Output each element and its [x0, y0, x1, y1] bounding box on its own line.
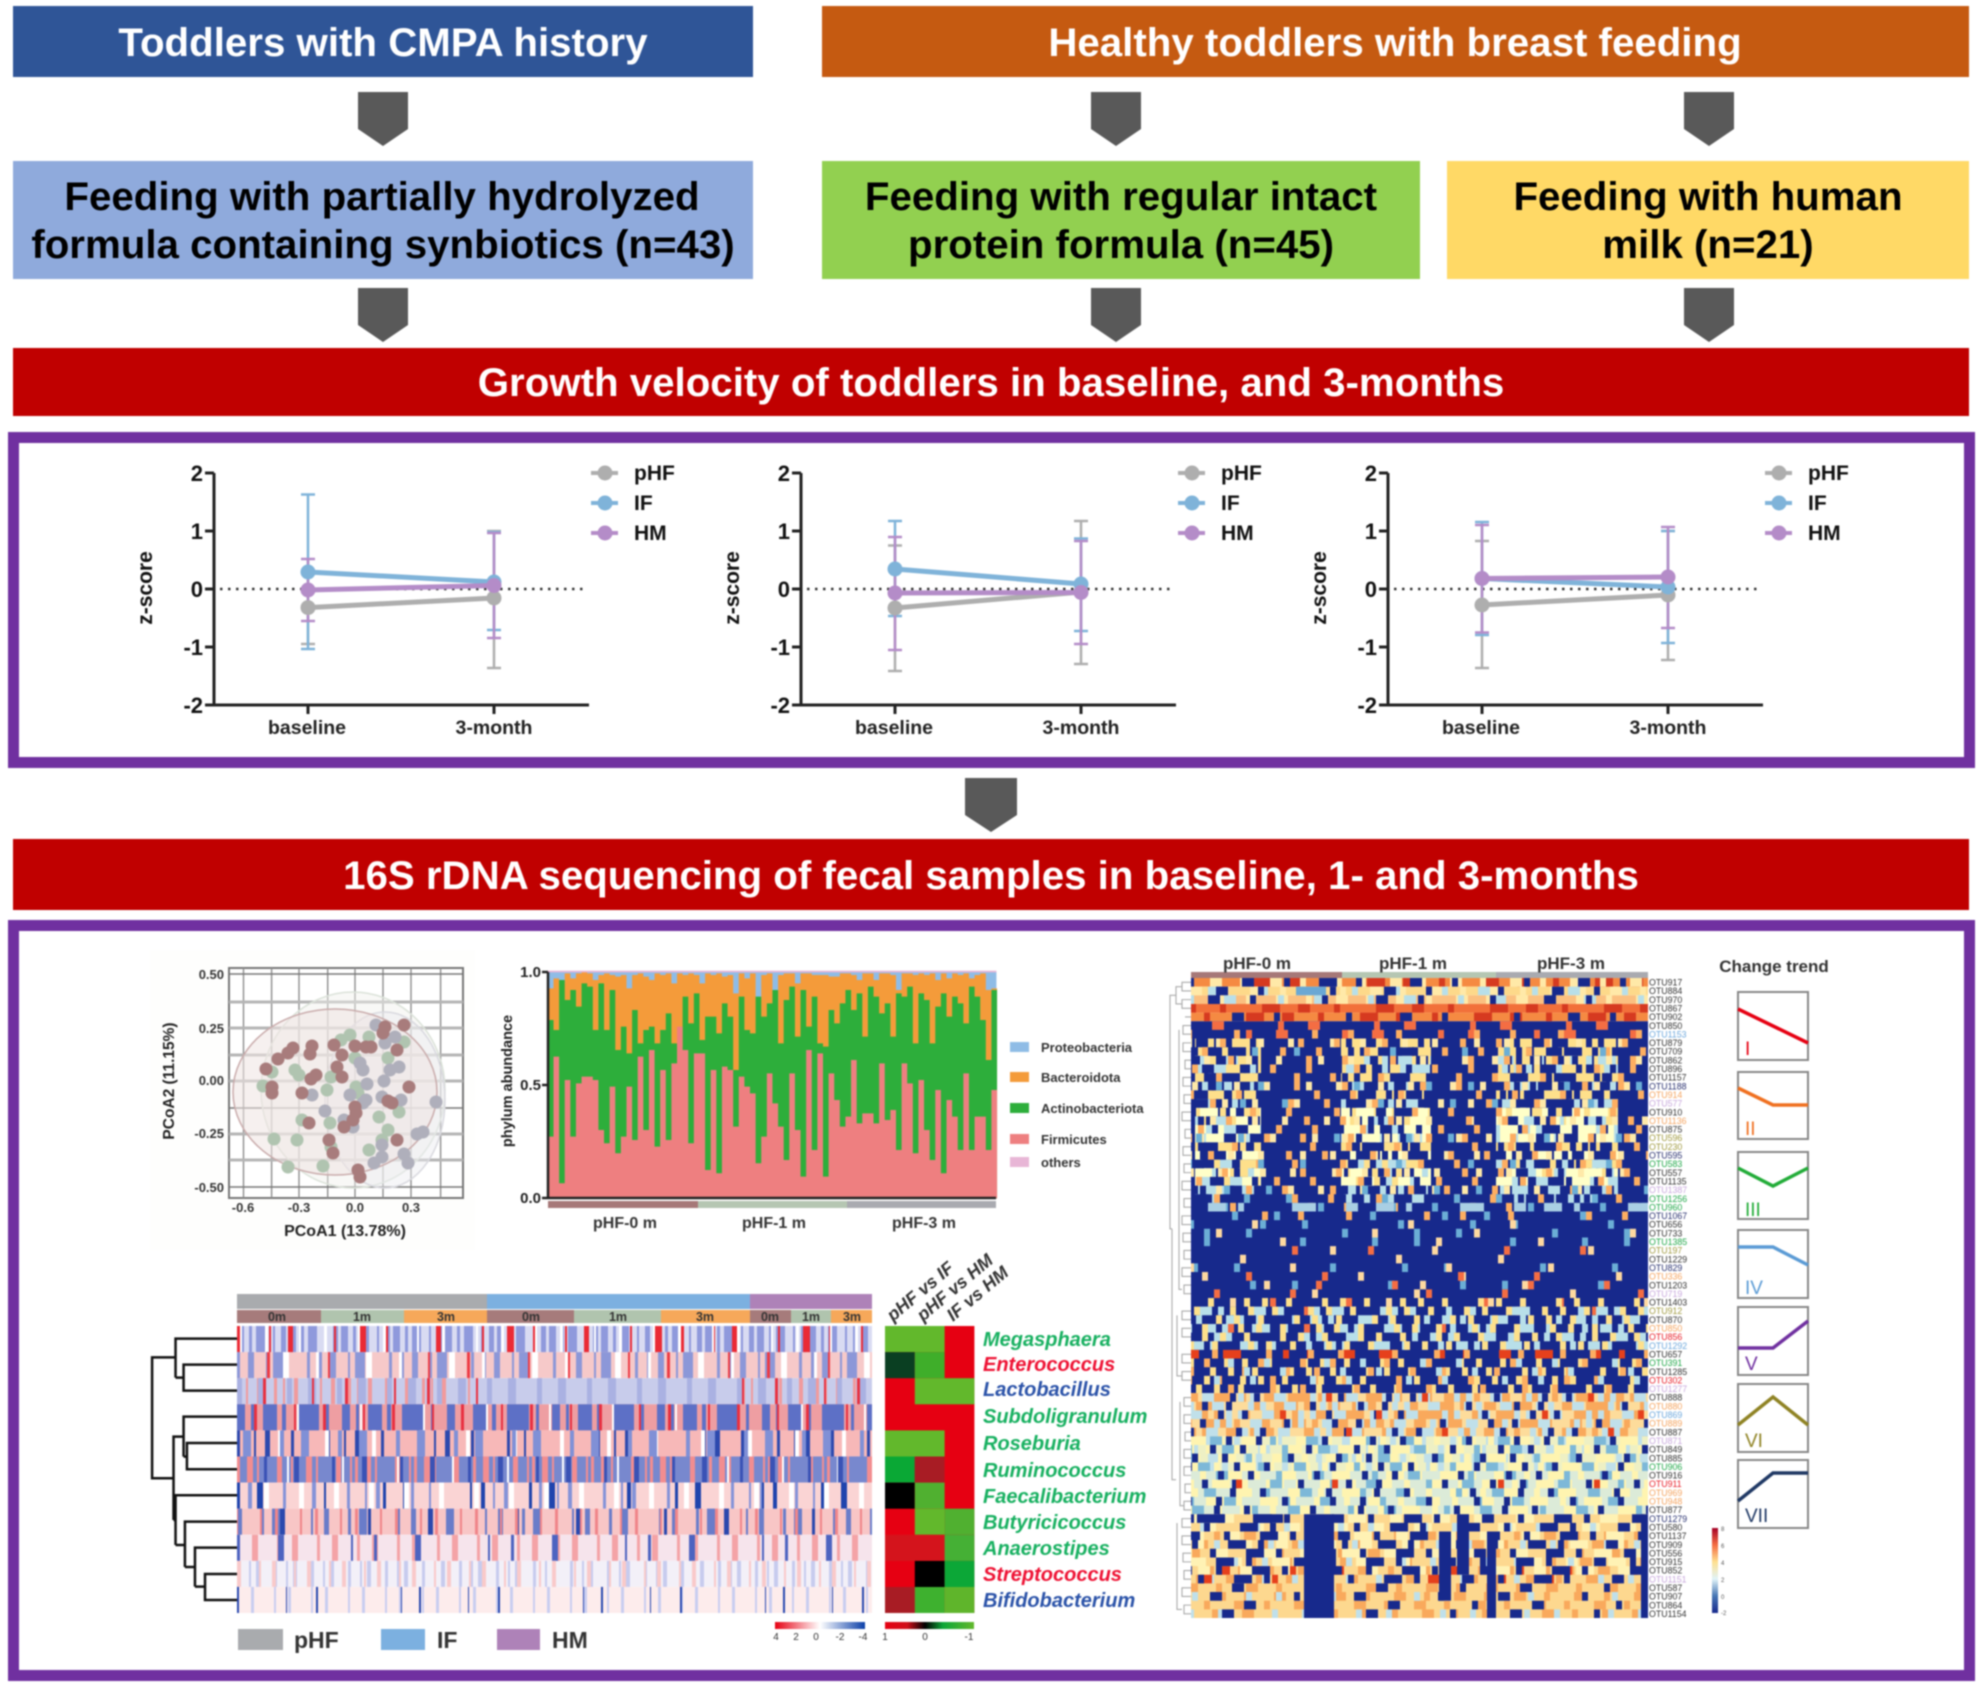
chart: PCoA scatter	[150, 950, 475, 1250]
banner: growth velocity	[13, 348, 1969, 416]
change trend panel	[1719, 957, 1829, 1528]
OTU labels: OTU583	[1649, 1159, 1682, 1169]
line chart 3: 2	[1365, 461, 1377, 486]
OTU labels: OTU909	[1649, 1540, 1682, 1550]
OTU labels: OTU906	[1649, 1462, 1682, 1472]
color scale: comparison: -1	[965, 1632, 974, 1643]
OTU labels: OTU910	[1649, 1107, 1682, 1117]
OTU labels: OTU1067	[1649, 1211, 1687, 1221]
line chart 2: -2	[770, 693, 790, 718]
OTU labels: OTU587	[1649, 1583, 1682, 1593]
OTU labels: OTU880	[1649, 1401, 1682, 1411]
OTU labels: OTU1279	[1649, 1514, 1687, 1524]
color bar: 2	[1721, 1578, 1725, 1584]
line chart 2: 2	[778, 461, 790, 486]
OTU labels: OTU912	[1649, 1306, 1682, 1316]
OTU labels: OTU969	[1649, 1488, 1682, 1498]
header: toddlers with CMPA history	[13, 6, 753, 77]
column headers: pHF-3 m	[1537, 954, 1605, 973]
legend: phyla	[1010, 1040, 1144, 1170]
banner: growth velocity: Growth velocity of toddlers in baseline, and 3-months	[478, 360, 1504, 405]
OTU labels: OTU917	[1649, 978, 1682, 988]
OTU labels: OTU879	[1649, 1038, 1682, 1048]
header: toddlers with CMPA history: Toddlers with CMPA history	[118, 20, 648, 65]
box: partially hydrolyzed formula: Feeding with partially hydrolyzed	[64, 174, 700, 219]
legend: phyla: Proteobacteria	[1041, 1040, 1133, 1055]
change trend panel: Change trend	[1719, 957, 1829, 976]
OTU labels: OTU887	[1649, 1427, 1682, 1437]
OTU labels: OTU1157	[1649, 1073, 1687, 1083]
OTU labels: OTU577	[1649, 1099, 1682, 1109]
trend I: I	[1745, 1039, 1750, 1060]
genus labels: Enterococcus	[983, 1354, 1115, 1376]
line chart 3: pHF	[1808, 462, 1849, 485]
OTU labels: OTU719	[1649, 1289, 1682, 1299]
chart: phylum stacked bars: 1.0	[520, 964, 541, 981]
OTU labels: OTU1285	[1649, 1367, 1687, 1377]
legend: groups: pHF	[294, 1627, 339, 1653]
heatmap cells	[1190, 976, 1650, 1620]
chart: PCoA scatter: 0.3	[402, 1200, 420, 1215]
line chart 3: -2	[1357, 693, 1377, 718]
chart: PCoA scatter: 0.0	[346, 1200, 364, 1215]
line chart 3: HM	[1808, 522, 1841, 545]
line chart 1: 2	[191, 461, 203, 486]
OTU labels: OTU302	[1649, 1375, 1682, 1385]
OTU labels: OTU870	[1649, 1315, 1682, 1325]
line chart 1: IF	[634, 492, 653, 515]
annotation bars	[237, 1294, 872, 1324]
annotation bars: 3m	[437, 1310, 455, 1324]
OTU labels: OTU336	[1649, 1272, 1682, 1282]
comparison heatmap: pHF vs HM	[912, 1249, 998, 1326]
column headers	[1191, 954, 1648, 978]
OTU labels: OTU864	[1649, 1600, 1682, 1610]
OTU labels: OTU1153	[1649, 1029, 1687, 1039]
color scale: abundance: -4	[859, 1632, 868, 1643]
OTU labels: OTU867	[1649, 1004, 1682, 1014]
trend VII	[1738, 1460, 1808, 1528]
OTU labels: OTU391	[1649, 1358, 1682, 1368]
OTU labels: OTU896	[1649, 1064, 1682, 1074]
genus labels: Lactobacillus	[983, 1379, 1111, 1401]
chart: PCoA scatter: 0.00	[199, 1073, 224, 1088]
color scale: comparison	[882, 1622, 974, 1643]
OTU labels: OTU875	[1649, 1125, 1682, 1135]
line chart 2: -1	[770, 635, 790, 660]
genus labels: Butyricicoccus	[983, 1512, 1126, 1534]
OTU labels: OTU862	[1649, 1055, 1682, 1065]
box: partially hydrolyzed formula	[13, 161, 753, 279]
legend: phyla: Bacteroidota	[1041, 1070, 1121, 1085]
OTU labels: OTU580	[1649, 1522, 1682, 1532]
OTU labels: OTU1229	[1649, 1254, 1687, 1264]
legend: phyla: Firmicutes	[1041, 1132, 1107, 1147]
OTU labels: OTU914	[1649, 1090, 1682, 1100]
color scale: abundance: 2	[793, 1632, 799, 1643]
OTU labels: OTU884	[1649, 986, 1682, 996]
OTU labels: OTU829	[1649, 1263, 1682, 1273]
color scale: comparison: 1	[882, 1632, 888, 1643]
OTU labels: OTU1403	[1649, 1298, 1687, 1308]
line chart 2: IF	[1221, 492, 1240, 515]
OTU labels: OTU907	[1649, 1592, 1682, 1602]
box: human milk: milk (n=21)	[1602, 222, 1814, 267]
color scale: abundance: 4	[773, 1632, 779, 1643]
line chart 2: 3-month	[1043, 717, 1119, 739]
trend VI	[1738, 1384, 1808, 1452]
header: healthy toddlers with breast feeding: Healthy toddlers with breast feeding	[1048, 20, 1742, 65]
line chart 1: z-score	[134, 551, 157, 625]
OTU labels: OTU902	[1649, 1012, 1682, 1022]
annotation bars: 0m	[761, 1310, 779, 1324]
line chart 3: 3-month	[1630, 717, 1706, 739]
OTU labels: OTU856	[1649, 1332, 1682, 1342]
genus labels: Streptococcus	[983, 1564, 1122, 1586]
comparison heatmap: IF vs HM	[943, 1262, 1013, 1325]
line chart 3: z-score	[1308, 551, 1331, 625]
annotation bars: 0m	[522, 1310, 540, 1324]
arrows: first row	[358, 92, 1734, 146]
OTU labels: OTU916	[1649, 1471, 1682, 1481]
OTU labels: OTU595	[1649, 1150, 1682, 1160]
comparison heatmap	[882, 1249, 1013, 1613]
line chart 1: -2	[183, 693, 203, 718]
color scale: abundance: 0	[813, 1632, 819, 1643]
chart: PCoA scatter: PCoA2 (11.15%)	[161, 1022, 178, 1140]
annotation bars: 3m	[843, 1310, 861, 1324]
annotation bars: 0m	[268, 1310, 286, 1324]
color bar: -2	[1721, 1611, 1727, 1617]
color bar: 8	[1721, 1527, 1725, 1533]
chart: PCoA scatter: -0.50	[194, 1180, 224, 1195]
OTU labels	[1649, 978, 1687, 1619]
line chart 2: 1	[778, 519, 790, 544]
legend: groups: IF	[437, 1627, 457, 1653]
OTU labels: OTU1151	[1649, 1574, 1687, 1584]
header: healthy toddlers with breast feeding	[822, 6, 1969, 77]
legend: phyla: others	[1041, 1155, 1081, 1170]
box: human milk: Feeding with human	[1513, 174, 1903, 219]
genus labels: Megasphaera	[983, 1329, 1111, 1351]
OTU labels: OTU1256	[1649, 1194, 1687, 1204]
legend: groups	[238, 1627, 588, 1653]
chart: PCoA scatter: 0.50	[199, 967, 224, 982]
arrow: to sequencing	[965, 778, 1017, 832]
OTU labels: OTU885	[1649, 1453, 1682, 1463]
box: partially hydrolyzed formula: formula containing synbiotics (n=43)	[31, 222, 735, 267]
line chart 3: IF	[1808, 492, 1827, 515]
OTU labels: OTU656	[1649, 1220, 1682, 1230]
OTU labels: OTU1387	[1649, 1185, 1687, 1195]
chart: PCoA scatter: 0.25	[199, 1021, 224, 1036]
line chart 3: 1	[1365, 519, 1377, 544]
line chart 1: 0	[191, 577, 203, 602]
color scale: abundance: -2	[836, 1632, 845, 1643]
annotation bars: 3m	[696, 1310, 714, 1324]
chart: phylum stacked bars: phylum abundance	[500, 1015, 516, 1147]
OTU labels: OTU850	[1649, 1324, 1682, 1334]
heatmap cells	[236, 1325, 873, 1614]
comparison heatmap: pHF vs IF	[882, 1257, 958, 1326]
OTU labels: OTU733	[1649, 1228, 1682, 1238]
OTU labels: OTU230	[1649, 1142, 1682, 1152]
chart: PCoA scatter: -0.6	[232, 1200, 254, 1215]
color bar: 4	[1721, 1561, 1725, 1567]
chart: phylum stacked bars: 0.0	[520, 1190, 541, 1207]
OTU labels: OTU596	[1649, 1133, 1682, 1143]
panel: growth z-score charts	[14, 438, 1970, 762]
column headers: pHF-0 m	[1223, 954, 1291, 973]
panel: microbiota analyses	[14, 926, 1970, 1676]
line chart 3: -1	[1357, 635, 1377, 660]
OTU labels: OTU869	[1649, 1410, 1682, 1420]
chart: phylum stacked bars: pHF-0 m	[593, 1215, 657, 1232]
box: regular intact protein formula: Feeding with regular intact	[865, 174, 1377, 219]
OTU labels: OTU889	[1649, 1419, 1682, 1429]
OTU labels: OTU888	[1649, 1393, 1682, 1403]
line chart 3	[1308, 461, 1849, 739]
OTU labels: OTU1188	[1649, 1081, 1687, 1091]
OTU labels: OTU915	[1649, 1557, 1682, 1567]
legend: groups: HM	[552, 1627, 588, 1653]
line chart 1: -1	[183, 635, 203, 660]
trend I	[1738, 992, 1808, 1060]
trend VI: VI	[1745, 1431, 1763, 1452]
line chart 1: HM	[634, 522, 667, 545]
genus labels: Ruminococcus	[983, 1460, 1126, 1482]
genus labels: Anaerostipes	[982, 1538, 1110, 1560]
chart: PCoA scatter: PCoA1 (13.78%)	[284, 1223, 406, 1240]
banner: 16S rDNA sequencing: 16S rDNA sequencing of fecal samples in baseline, 1- and 3-months	[343, 853, 1639, 898]
genus labels: Roseburia	[983, 1433, 1081, 1455]
box: regular intact protein formula	[822, 161, 1420, 279]
color bar	[1712, 1527, 1727, 1617]
line chart 2: 0	[778, 577, 790, 602]
line chart 1	[134, 461, 675, 739]
line chart 2: z-score	[721, 551, 744, 625]
chart: phylum stacked bars: 0.5	[520, 1077, 541, 1094]
annotation bars: 1m	[802, 1310, 820, 1324]
banner: 16S rDNA sequencing	[13, 839, 1969, 910]
OTU labels: OTU1137	[1649, 1531, 1687, 1541]
color bar: 0	[1721, 1595, 1725, 1601]
trend II: II	[1745, 1119, 1756, 1140]
box: regular intact protein formula: protein formula (n=45)	[908, 222, 1334, 267]
legend: phyla: Actinobacteriota	[1041, 1101, 1144, 1116]
OTU labels: OTU1385	[1649, 1237, 1687, 1247]
line chart 3: 0	[1365, 577, 1377, 602]
trend V	[1738, 1307, 1808, 1375]
OTU labels: OTU657	[1649, 1350, 1682, 1360]
OTU labels: OTU1203	[1649, 1280, 1687, 1290]
genus labels	[982, 1329, 1147, 1612]
trend VII: VII	[1745, 1506, 1768, 1527]
trend V: V	[1745, 1354, 1758, 1375]
chart: phylum stacked bars: pHF-1 m	[742, 1215, 806, 1232]
dendrogram	[1170, 982, 1191, 1614]
OTU labels: OTU871	[1649, 1436, 1682, 1446]
OTU labels: OTU960	[1649, 1202, 1682, 1212]
OTU labels: OTU557	[1649, 1168, 1682, 1178]
line chart 3: baseline	[1442, 717, 1520, 739]
color bar: 6	[1721, 1544, 1725, 1550]
annotation bars: 1m	[609, 1310, 627, 1324]
color scale: abundance	[773, 1622, 868, 1643]
line chart 1: 1	[191, 519, 203, 544]
line chart 2: HM	[1221, 522, 1254, 545]
trend IV	[1738, 1230, 1808, 1299]
dendrogram	[152, 1339, 237, 1600]
OTU labels: OTU948	[1649, 1496, 1682, 1506]
OTU labels: OTU197	[1649, 1246, 1682, 1256]
OTU labels: OTU1135	[1649, 1176, 1687, 1186]
genus labels: Bifidobacterium	[983, 1590, 1135, 1612]
box: human milk	[1447, 161, 1969, 279]
genus labels: Subdoligranulum	[983, 1406, 1147, 1428]
OTU labels: OTU850	[1649, 1021, 1682, 1031]
line chart 1: baseline	[268, 717, 346, 739]
OTU labels: OTU556	[1649, 1548, 1682, 1558]
line chart 2	[721, 461, 1262, 739]
line chart 2: baseline	[855, 717, 933, 739]
annotation bars: 1m	[353, 1310, 371, 1324]
OTU labels: OTU911	[1649, 1479, 1682, 1489]
line chart 1: pHF	[634, 462, 675, 485]
OTU labels: OTU1292	[1649, 1341, 1687, 1351]
chart: phylum stacked bars	[500, 964, 1144, 1232]
chart: phylum stacked bars: pHF-3 m	[892, 1215, 956, 1232]
chart: PCoA scatter: -0.25	[194, 1126, 224, 1141]
trend II	[1738, 1072, 1808, 1140]
trend IV: IV	[1745, 1278, 1763, 1299]
genus labels: Faecalibacterium	[983, 1486, 1146, 1508]
color scale: comparison: 0	[922, 1632, 928, 1643]
arrows: second row	[358, 288, 1734, 342]
OTU labels: OTU1277	[1649, 1384, 1687, 1394]
OTU labels: OTU1154	[1649, 1609, 1687, 1619]
line chart 2: pHF	[1221, 462, 1262, 485]
OTU labels: OTU1136	[1649, 1116, 1687, 1126]
OTU labels: OTU970	[1649, 995, 1682, 1005]
trend III: III	[1745, 1200, 1761, 1221]
chart: OTU heatmap	[1054, 954, 1727, 1619]
OTU labels: OTU877	[1649, 1505, 1682, 1515]
trend III	[1738, 1152, 1808, 1221]
line chart 1: 3-month	[456, 717, 532, 739]
OTU labels: OTU709	[1649, 1047, 1682, 1057]
OTU labels: OTU852	[1649, 1566, 1682, 1576]
chart: genus heatmap with dendrogram	[152, 1249, 1147, 1653]
OTU labels: OTU849	[1649, 1445, 1682, 1455]
column headers: pHF-1 m	[1379, 954, 1447, 973]
chart: PCoA scatter: -0.3	[288, 1200, 310, 1215]
